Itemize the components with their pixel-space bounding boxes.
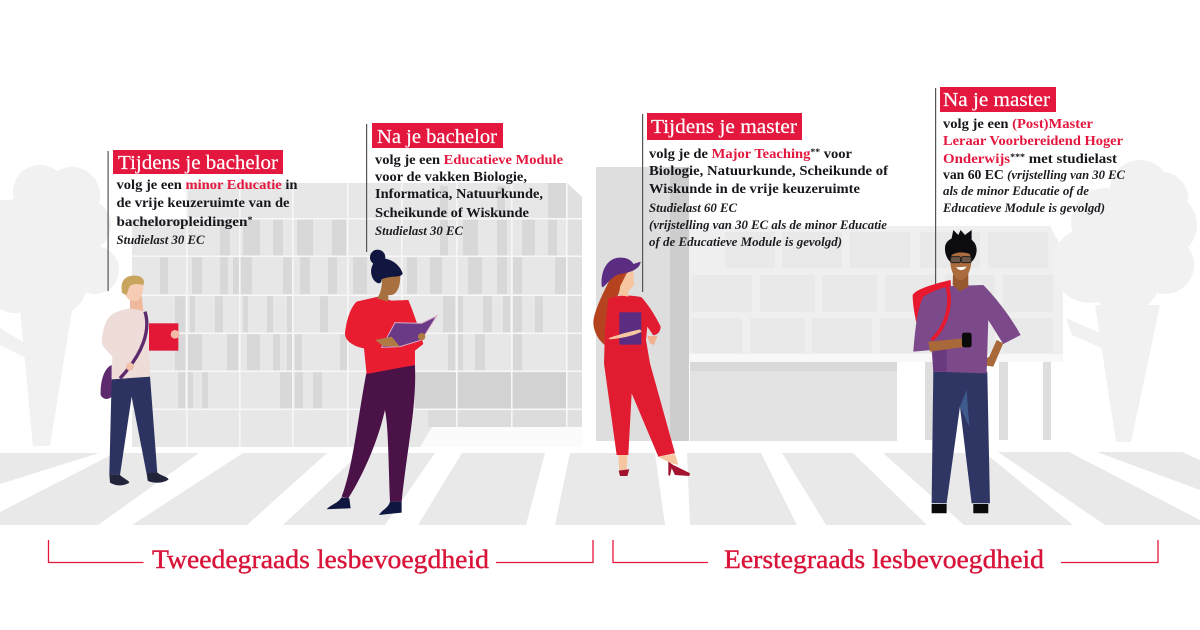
text block: na je master: van 60 EC (vrijstelling van 30 EC bbox=[943, 167, 1126, 182]
text block: tijdens je master: Studielast 60 EC bbox=[649, 201, 738, 215]
figure: student with red book bbox=[101, 276, 179, 485]
text block: tijdens je bachelor: volg je een minor Educatie in bbox=[116, 177, 298, 192]
label: tweedegraads lesbevoegdheid: Tweedegraads lesbevoegdheid bbox=[152, 545, 489, 574]
bracket: tweedegraads lesbevoegdheid bbox=[48, 540, 593, 574]
callout line: na je bachelor bbox=[366, 124, 367, 252]
callout line: tijdens je bachelor bbox=[108, 151, 109, 291]
text block: na je master: met studielast bbox=[1025, 151, 1118, 166]
heading: na je bachelor: Na je bachelor bbox=[377, 126, 497, 148]
text block: tijdens je master: ** bbox=[810, 147, 821, 157]
callout line: tijdens je master bbox=[642, 114, 643, 292]
text block: na je master: Educatieve Module is gevolgd) bbox=[942, 201, 1105, 215]
figure: man with backpack and phone bbox=[913, 230, 1021, 513]
building: right block bbox=[596, 167, 1063, 441]
left tree bbox=[0, 165, 119, 446]
text block: na je master: Leraar Voorbereidend Hoger bbox=[943, 133, 1123, 148]
text block: na je bachelor: volg je een Educatieve Module bbox=[375, 152, 563, 167]
right tree bbox=[1052, 160, 1197, 442]
text block: na je bachelor bbox=[372, 123, 563, 238]
text block: na je bachelor: Studielast 30 EC bbox=[375, 224, 464, 238]
heading: na je master: Na je master bbox=[943, 89, 1050, 111]
text block: na je master: *** bbox=[1010, 152, 1026, 162]
text block: na je master: volg je een (Post)Master bbox=[943, 116, 1093, 131]
text block: na je bachelor: Informatica, Natuurkunde, bbox=[375, 186, 543, 201]
text block: na je master bbox=[940, 87, 1126, 215]
text block: tijdens je master: of de Educatieve Module is gevolgd) bbox=[649, 235, 842, 249]
figure: woman with hat bbox=[593, 258, 690, 476]
text block: tijdens je bachelor: bacheloropleidingen bbox=[116, 214, 233, 229]
callout line: na je master bbox=[935, 88, 936, 286]
text block: tijdens je master: volg je de Major Teaching bbox=[649, 146, 803, 161]
text block: tijdens je bachelor: Studielast 30 EC bbox=[116, 233, 205, 247]
text block: tijdens je bachelor bbox=[113, 150, 298, 247]
text block: tijdens je master: Biologie, Natuurkunde, Scheikunde of bbox=[649, 163, 889, 178]
ground: pedestrian crossing bbox=[0, 452, 1200, 525]
text block: tijdens je master: Wiskunde in de vrije keuzeruimte bbox=[649, 181, 860, 196]
text block: tijdens je bachelor: de vrije keuzeruimte van de bbox=[116, 195, 290, 210]
label: eerstegraads lesbevoegdheid: Eerstegraads lesbevoegdheid bbox=[724, 545, 1044, 574]
text block: tijdens je master: (vrijstelling van 30 EC als de minor Educatie bbox=[649, 218, 887, 232]
text block: na je bachelor: voor de vakken Biologie, bbox=[375, 169, 527, 184]
text block: tijdens je master bbox=[647, 113, 889, 249]
heading: tijdens je bachelor: Tijdens je bachelor bbox=[118, 152, 278, 174]
text block: na je master: als de minor Educatie of de bbox=[943, 184, 1089, 198]
text block: tijdens je master: voor bbox=[820, 146, 852, 161]
text block: na je master: Onderwijs bbox=[943, 151, 1010, 166]
bracket: eerstegraads lesbevoegdheid bbox=[613, 540, 1158, 574]
building: left block with bookshelf facade bbox=[132, 183, 582, 447]
text block: tijdens je bachelor: * bbox=[247, 215, 253, 225]
heading: tijdens je master: Tijdens je master bbox=[651, 116, 797, 138]
text block: na je bachelor: Scheikunde of Wiskunde bbox=[375, 205, 529, 220]
figure: woman reading purple book bbox=[327, 250, 437, 515]
